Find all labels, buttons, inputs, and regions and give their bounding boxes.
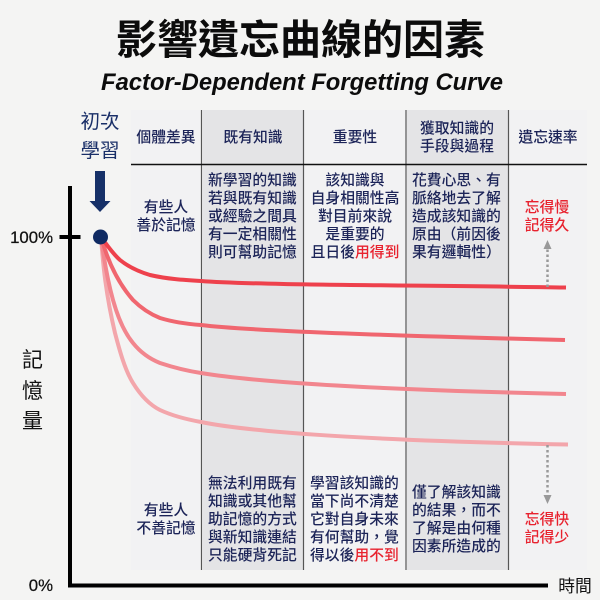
column headers: 遺忘速率 [518,128,578,146]
cell: importance, poor: 它對自身未來 [310,510,399,528]
cell: importance, good [311,172,399,261]
cell: prior knowledge, poor: 知識或其他幫 [208,493,297,510]
row label: good at remembering: 善於記憶 [136,216,196,234]
row label: poor at remembering: 有些人 [144,502,188,519]
cell: acquisition, good: 果有邏輯性） [412,244,501,261]
y axis title: 憶 [22,380,43,403]
cell: acquisition, good: 原由（前因後 [412,226,501,243]
cell: importance, good: 自身相關性高 [311,190,399,207]
cell: importance, poor: 得以後用不到 [310,547,399,564]
100% label: 100% [10,228,53,247]
cell: acquisition, poor: 的結果，而不 [412,502,501,519]
curve 4 (lightest) [101,237,568,444]
red label: forget quickly: 記得少 [525,529,569,546]
cell: prior knowledge, poor: 只能硬背死記 [208,546,297,564]
cell: prior knowledge, poor: 助記憶的方式 [208,510,297,528]
start point dot [93,230,108,244]
row label: good at remembering: 有些人 [144,199,188,216]
red label: forget slowly: 記得久 [525,217,569,234]
cell: acquisition, good: 脈絡地去了解 [412,190,501,207]
title: 影響遺忘曲線的因素 [116,6,485,66]
cell: acquisition, good: 造成該知識的 [412,208,501,225]
subtitle: Factor-Dependent Forgetting Curve [101,69,503,96]
cell: prior knowledge, poor: 無法利用既有 [208,474,297,492]
cell: acquisition, good: 花費心思、有 [412,172,501,189]
curve 2 [101,237,565,340]
cell: importance, poor: 當下尚不清楚 [310,493,399,510]
arrow: slower forgetting up [544,240,552,287]
cell: prior knowledge, poor [208,474,297,564]
red label: forget slowly: 忘得慢 [525,199,569,216]
y axis title: 記 [22,349,43,372]
0% label: 0% [29,576,53,595]
first learning label [80,111,120,162]
red label: forget quickly [525,511,569,546]
arrow: faster forgetting down [544,445,552,504]
column headers: 個體差異 [136,129,196,146]
row label: poor at remembering: 不善記憶 [136,519,196,537]
cell: prior knowledge, good: 有一定相關性 [208,225,297,243]
first learning label: 初次 [80,111,120,133]
cell: prior knowledge, good: 新學習的知識 [208,171,297,189]
row label: good at remembering [136,199,196,234]
cell: importance, good: 對目前來說 [318,208,392,225]
y axis title [22,349,43,433]
cell: prior knowledge, poor: 與新知識連結 [208,528,297,546]
cell: importance, poor [310,474,399,564]
cell: importance, poor: 有何幫助，覺 [310,529,399,546]
cell: prior knowledge, good: 則可幫助記憶 [208,243,297,261]
axes [70,186,548,586]
cell: acquisition, poor [412,483,501,555]
cell: importance, poor: 學習該知識的 [310,474,399,492]
100% tick [60,235,80,239]
column headers: 手段與過程 [420,137,494,155]
x axis title: 時間 [558,577,592,596]
column headers: 獲取知識的 [420,120,494,137]
cell: acquisition, poor: 了解是由何種 [412,520,501,537]
table panel [131,110,587,570]
curve 3 [101,237,566,394]
red label: forget quickly: 忘得快 [525,511,569,528]
arrow: first learning down [90,171,110,212]
cell: importance, good: 且日後用得到 [311,244,399,261]
curve 1 (strongest) [101,237,566,288]
cell: importance, good: 是重要的 [325,226,385,243]
cell: prior knowledge, good [208,171,297,261]
cell: acquisition, poor: 僅了解該知識 [412,483,501,501]
row label: poor at remembering [136,502,196,537]
red label: forget slowly [525,199,569,234]
cell: acquisition, poor: 因素所造成的 [412,538,501,555]
cell: acquisition, good [412,172,501,261]
column headers [136,120,578,155]
cell: importance, good: 該知識與 [325,172,385,189]
column headers: 重要性 [333,129,377,146]
cell: prior knowledge, good: 若與既有知識 [208,190,297,207]
column headers: 既有知識 [223,129,283,146]
first learning label: 學習 [80,140,120,162]
cell: prior knowledge, good: 或經驗之間具 [208,207,297,225]
y axis title: 量 [22,410,43,433]
